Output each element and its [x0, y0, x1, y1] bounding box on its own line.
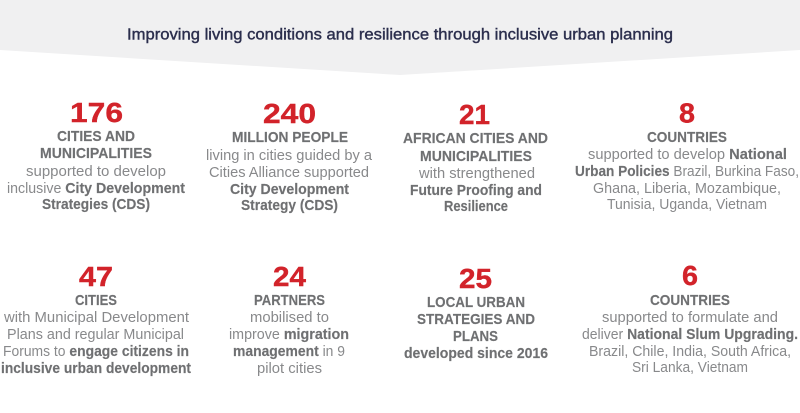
description: 6: supported to formulate and: [602, 310, 778, 326]
description: 25: STRATEGIES AND: [417, 312, 535, 328]
description: 47: Forums to engage citizens in: [3, 344, 189, 360]
stat: 25 local urban strategies: [404, 263, 548, 362]
number: 6: 6: [682, 260, 698, 291]
description: 24: improve migration: [229, 327, 349, 343]
stat: 8 countries urban policies: [575, 98, 799, 213]
stat: 47 cities: [1, 261, 191, 377]
description: 8: supported to develop National: [588, 147, 787, 163]
number: 176: 176: [70, 97, 123, 128]
description: 24: [229, 293, 349, 377]
description: 240: Strategy (CDS): [241, 198, 338, 214]
number: 8: 8: [679, 98, 695, 128]
number: 25: 25: [459, 263, 492, 294]
number: 47: 47: [79, 261, 113, 292]
description: 47: inclusive urban development: [1, 361, 191, 377]
description: 21: Future Proofing and: [410, 183, 542, 199]
stat: 24 partners: [229, 261, 349, 377]
description: 6: deliver National Slum Upgrading.: [582, 327, 798, 343]
description: 25: PLANS: [453, 329, 498, 345]
description: 176: CITIES AND: [57, 129, 135, 145]
header banner: [0, 0, 800, 75]
description: 176: inclusive City Development: [7, 181, 185, 197]
description: 8: [575, 130, 799, 213]
number: 24: 24: [273, 261, 306, 292]
description: 240: City Development: [230, 182, 349, 198]
stat: 240 million people: [206, 98, 373, 214]
description: 176: [7, 129, 185, 213]
number: 240: 240: [263, 98, 316, 129]
stat: 6 countries slum upgrading: [582, 260, 798, 376]
description: 24: mobilised to: [250, 310, 329, 326]
stat: 176 cities and municipalities: [7, 97, 185, 213]
description: 8: Tunisia, Uganda, Vietnam: [607, 197, 767, 213]
description: 176: Strategies (CDS): [42, 197, 150, 213]
description: 47: CITIES: [75, 293, 117, 309]
description: 21: Resilience: [444, 199, 508, 215]
description: 47: with Municipal Development: [3, 310, 189, 326]
description: 6: Brazil, Chile, India, South Africa,: [589, 344, 791, 360]
description: 47: Plans and regular Municipal: [7, 327, 184, 343]
description: 21: AFRICAN CITIES AND: [403, 131, 548, 147]
description: 25: LOCAL URBAN: [427, 295, 525, 311]
description: 24: pilot cities: [257, 361, 322, 377]
title: Improving living conditions and resilience through inclusive urban planning: [127, 26, 673, 44]
description: 6: [582, 293, 798, 376]
description: 24: PARTNERS: [254, 293, 325, 309]
description: 21: with strengthened: [418, 166, 535, 182]
description: 240: MILLION PEOPLE: [232, 130, 348, 146]
description: 8: COUNTRIES: [647, 130, 727, 146]
description: 240: living in cities guided by a: [206, 148, 373, 164]
description: 8: Ghana, Liberia, Mozambique,: [593, 181, 781, 197]
description: 176: MUNICIPALITIES: [40, 146, 152, 162]
description: 176: supported to develop: [26, 164, 166, 180]
number: 21: 21: [459, 99, 490, 130]
description: 25: developed since 2016: [404, 346, 548, 362]
description: 47: [1, 293, 191, 377]
description: 25: [404, 295, 548, 362]
description: 240: Cities Alliance supported: [209, 165, 369, 181]
description: 24: management in 9: [233, 344, 345, 360]
description: 6: COUNTRIES: [650, 293, 730, 309]
description: 21: MUNICIPALITIES: [420, 149, 532, 165]
description: 240: [206, 130, 373, 214]
description: 21: [403, 131, 548, 215]
stat: 21 African cities: [403, 99, 548, 215]
description: 6: Sri Lanka, Vietnam: [632, 360, 748, 376]
